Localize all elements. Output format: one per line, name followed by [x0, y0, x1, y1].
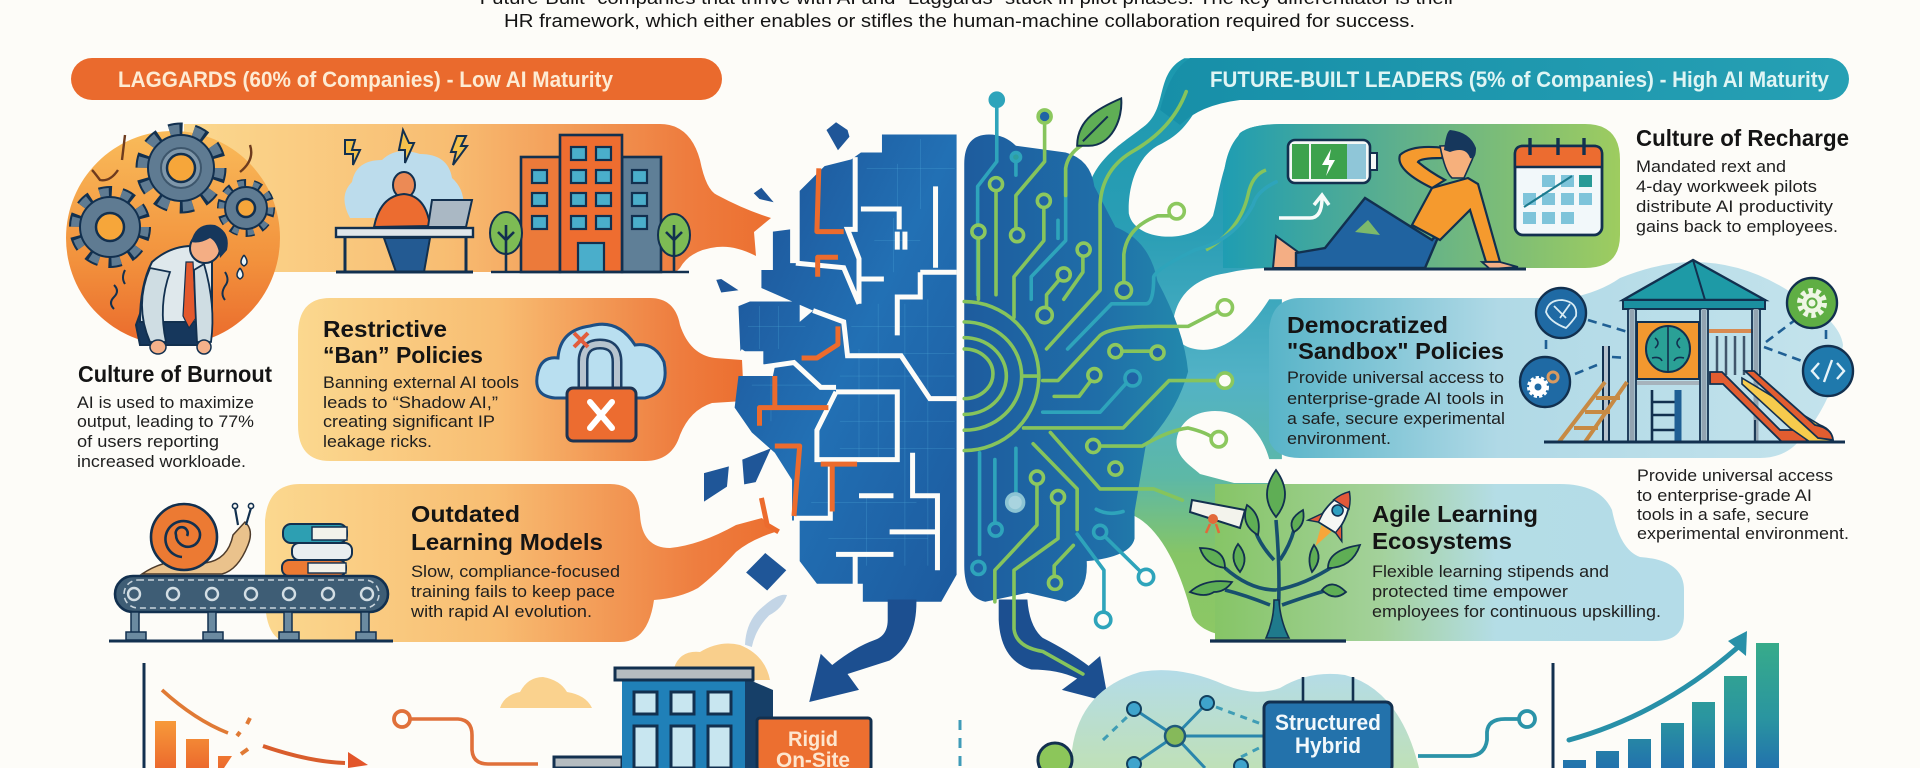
- text: agile body: employees for continuous upskilling.: [1372, 603, 1661, 621]
- text: restrictive body: leakage ricks.: [323, 433, 432, 451]
- text: outdated body: with rapid AI evolution.: [410, 603, 592, 621]
- brain: circuit right half: [964, 92, 1276, 674]
- text: recharge body: distribute AI productivity: [1636, 198, 1834, 216]
- text: agile body: protected time empower: [1372, 583, 1569, 601]
- heading: outdated: Outdated: [411, 501, 520, 527]
- panel: restrictive ban policies band: [298, 298, 744, 461]
- teal and green connector ribbons: [1085, 58, 1284, 642]
- text: recharge body: 4-day workweek pilots: [1636, 178, 1817, 196]
- smoke wisp: [745, 595, 787, 647]
- text: outdated body: Slow, compliance-focused: [411, 563, 620, 581]
- badge: brain: [1536, 288, 1586, 338]
- heading: restrictive: Restrictive: [323, 316, 447, 342]
- cloud: [500, 677, 592, 708]
- heading: agile learning: Ecosystems: [1372, 528, 1512, 554]
- text: burnout body: of users reporting: [77, 433, 219, 451]
- text: burnout body: AI is used to maximize: [77, 394, 254, 412]
- text: universal access note: experimental environment.: [1637, 525, 1849, 543]
- arrow: right brain to structured hybrid: [999, 600, 1109, 702]
- text: burnout body: increased workloade.: [77, 453, 246, 471]
- heading: democratized: [1287, 312, 1504, 364]
- divider dashes: [958, 720, 962, 768]
- icon: battery charging: [1279, 140, 1377, 218]
- sign: structured hybrid: [1264, 702, 1392, 768]
- laggards header pill: [71, 58, 722, 100]
- bar chart: rising leader performance: [1553, 631, 1779, 768]
- icon: AI sandbox playground: [1520, 260, 1853, 442]
- gear right: [222, 184, 270, 232]
- text: universal access note: tools in a safe, secure: [1637, 506, 1809, 524]
- text: universal access note: to enterprise-grade AI: [1637, 487, 1812, 505]
- brain: fractured blueprint left half: [704, 122, 957, 602]
- heading: outdated: [411, 501, 603, 555]
- badge: settings: [1787, 278, 1837, 328]
- icon: stressed worker at desk: [336, 130, 473, 272]
- heading: agile learning: Agile Learning: [1372, 501, 1538, 527]
- future-built leaders header pill: [1160, 58, 1849, 125]
- sign: structured hybrid: Hybrid: [1295, 733, 1361, 758]
- sign: rigid on-site: [757, 718, 871, 768]
- text: outdated body: [410, 563, 620, 621]
- intro text: [473, 0, 1455, 31]
- text: outdated body: training fails to keep pace: [411, 583, 615, 601]
- intro text: HR framework, which either enables or stifles the human-machine collaboration required for success.: [504, 10, 1415, 31]
- text: democratized body: Provide universal access to: [1287, 369, 1504, 387]
- heading: outdated: Learning Models: [411, 529, 603, 555]
- text: democratized body: [1287, 369, 1505, 448]
- gear large: [143, 130, 219, 206]
- icon: structured hybrid network: [1038, 670, 1419, 768]
- icon: snail on conveyor with books: [109, 503, 393, 641]
- icon: office building with trees: [490, 135, 690, 272]
- central brain illustration: [704, 92, 1276, 702]
- icon: rigid on-site office building: [554, 644, 871, 768]
- text: recharge body: Mandated rext and: [1636, 158, 1786, 176]
- heading: culture of burnout: Culture of Burnout: [78, 361, 272, 387]
- badge: gear: [1520, 357, 1570, 407]
- gear left: [76, 193, 144, 261]
- icon: leaf: [1077, 98, 1121, 146]
- icon: calendar: [1515, 138, 1602, 235]
- connector: hybrid to growth chart: [1418, 711, 1535, 756]
- bar chart: declining laggard performance: [144, 663, 368, 768]
- heading: democratized: "Sandbox" Policies: [1287, 338, 1504, 364]
- laggards header pill: LAGGARDS (60% of Companies) - Low AI Maturity: [118, 67, 614, 92]
- heading: culture of recharge: Culture of Recharge: [1636, 125, 1849, 151]
- text: burnout body: output, leading to 77%: [77, 413, 254, 431]
- badge: code: [1803, 346, 1853, 396]
- panel: culture of burnout band: [184, 124, 771, 272]
- sign: rigid on-site: Rigid: [788, 728, 838, 751]
- text: universal access note: Provide universal access: [1637, 467, 1833, 485]
- panel: outdated learning models band: [109, 484, 775, 642]
- icon: relaxing person: [1264, 130, 1526, 269]
- text: restrictive body: creating significant IP: [323, 413, 495, 431]
- text: agile body: Flexible learning stipends and: [1372, 563, 1609, 581]
- panel: democratized sandbox policies band: [1269, 260, 1853, 458]
- text: restrictive body: leads to “Shadow AI,”: [323, 394, 498, 412]
- text: universal access note: [1637, 467, 1849, 543]
- panel: agile learning ecosystems band: [1190, 470, 1684, 641]
- text: recharge body: gains back to employees.: [1636, 218, 1838, 236]
- heading: agile learning: [1372, 501, 1538, 554]
- future-built leaders header pill: FUTURE-BUILT LEADERS (5% of Companies) - High AI Maturity: [1210, 67, 1830, 92]
- arrow: left brain to rigid on-site: [809, 600, 916, 702]
- worker figure: [111, 225, 247, 354]
- sign: structured hybrid: Structured: [1275, 710, 1381, 735]
- text: restrictive body: [323, 374, 519, 451]
- text: democratized body: environment.: [1287, 430, 1391, 448]
- text: democratized body: a safe, secure experimental: [1287, 410, 1505, 428]
- text: burnout body: [77, 394, 254, 471]
- heading: democratized: Democratized: [1287, 312, 1448, 338]
- heading: restrictive: [323, 316, 483, 368]
- text: restrictive body: Banning external AI tools: [323, 374, 519, 392]
- text: recharge body: [1636, 158, 1838, 236]
- connector: chart to building: [394, 711, 538, 764]
- icon: cloud with padlock: [537, 324, 665, 441]
- icon: growing tree with diploma and rocket: [1190, 470, 1366, 641]
- icon: burned-out worker with gears: [66, 130, 280, 354]
- panel: culture of recharge band: [1206, 124, 1620, 269]
- text: agile body: [1372, 563, 1661, 621]
- text: democratized body: enterprise-grade AI tools in: [1287, 390, 1504, 408]
- heading: restrictive: “Ban” Policies: [323, 342, 483, 368]
